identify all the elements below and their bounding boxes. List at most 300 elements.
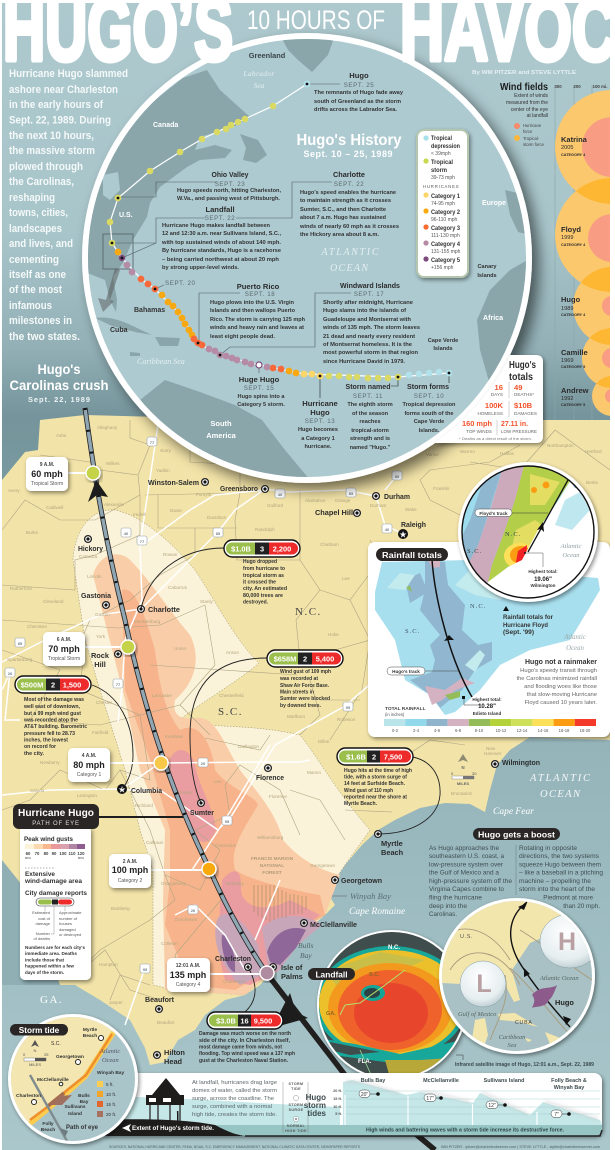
map: county names: Lee	[214, 779, 222, 784]
byline: By WM PITZER and STEVE LYTTLE	[472, 70, 576, 76]
callout: Charlotte damage: tropical storm as	[243, 573, 284, 579]
rainfall labels: N.C.	[470, 603, 486, 610]
callout: Columbia damage: 2	[51, 680, 55, 690]
map: county names: Fairfield	[92, 730, 109, 735]
callout: Columbia damage	[15, 676, 91, 757]
chart values: 20"	[361, 1092, 368, 1098]
map: county names: Lee	[342, 576, 350, 581]
eye position markers and time labels	[26, 457, 274, 992]
satellite labels: S.C.	[369, 972, 380, 978]
time box: 6 a.m.	[43, 632, 85, 666]
map: county names: Robeson	[337, 717, 356, 722]
rainfall: Hugo not a rainmaker text: that slow-moving Hurricane	[527, 692, 597, 698]
callout: Myrtle Beach damage: Hugo hits at the time of high	[344, 768, 413, 774]
callout: Charleston damage	[199, 1012, 296, 1064]
intro text: milestones in	[9, 315, 72, 327]
legend: city damage reports: immediate area. Deaths	[25, 951, 77, 956]
time connectors	[68, 473, 267, 974]
event: Ohio Valley: Ohio Valley	[212, 170, 249, 179]
storm tide map labels: Atlantic	[99, 1048, 120, 1055]
callout: Myrtle Beach damage: Wind gust of 110 mph	[344, 788, 393, 794]
circle: leader lines	[112, 84, 449, 398]
wind storm labels: 1999	[561, 235, 573, 241]
rainfall labels: (Sept. '99)	[503, 629, 534, 636]
callout: Charlotte damage: 3	[260, 544, 264, 554]
circle: shadow arrow through Florida	[98, 268, 120, 312]
intro text: ashore near Charleston	[9, 84, 118, 96]
event: Hugo Sept 25: The remnants of Hugo fade away	[314, 90, 404, 96]
storm tide scale	[23, 1040, 49, 1067]
boost labels: Sea	[508, 1042, 516, 1049]
city names: Charleston	[215, 954, 251, 963]
panel: Hugo's totals: LOW PRESSURE	[501, 429, 537, 434]
satellite labels	[326, 945, 400, 1065]
map: county names: Lexington	[77, 793, 97, 798]
event: Storm forms: Storm forms	[407, 382, 449, 391]
wind storm labels: CATEGORY 4	[561, 243, 586, 247]
event: Hugo Sept 25: SEPT. 25	[344, 82, 374, 89]
rainfall: Hugo's track: Hugo's track	[392, 669, 420, 674]
rainfall labels: Rainfall totals for	[503, 614, 554, 621]
chart heading: Hugo	[306, 1093, 326, 1102]
callout: Sumter damage: Shaw Air Force Base.	[280, 683, 329, 689]
map: county names: Marlboro	[287, 714, 306, 719]
legend: storm categories: Category 1	[431, 194, 461, 200]
callout: Charleston damage: side of the city. In Charleston itself,	[199, 1038, 290, 1044]
rainfall legend scale: 12-14	[517, 728, 528, 733]
boost: Hugo's track	[511, 902, 571, 1027]
chart values: 17"	[426, 1096, 434, 1102]
legend: city damage reports: houses	[59, 921, 72, 926]
map: county names: Forsyth	[196, 492, 212, 497]
map: interstate shields: 85	[216, 531, 221, 536]
legend: city damage reports: Approximate	[59, 910, 82, 915]
panel: Hugo's totals: DEATHS*	[514, 392, 534, 397]
chart column headings: Winyah Bay	[554, 1085, 584, 1091]
map: county names: Guilford	[267, 503, 284, 508]
map: county names: Calhoun	[146, 840, 164, 845]
callout: Columbia damage: was recorded atop the	[23, 718, 78, 724]
callout: Charleston damage: $3.0B	[216, 1016, 236, 1026]
callout: Myrtle Beach damage	[337, 748, 413, 807]
map: county names: Davie	[170, 508, 182, 513]
map: county names: Marion	[307, 770, 321, 775]
event: Landfall: – being carried northwest at about 20 mph	[162, 257, 280, 263]
rainfall: Hugo not a rainmaker text: Hugo's speedy transit through	[520, 668, 597, 674]
map: land	[2, 415, 610, 1065]
event: Landfall: Hurricane Hugo makes landfall between	[162, 223, 271, 229]
boost: high pressure sphere: H	[558, 928, 576, 956]
rainfall legend scale: TOTAL RAINFALL	[385, 706, 426, 712]
map: county names: Kershaw	[165, 734, 184, 739]
map: interstate shields: 85	[349, 491, 354, 496]
map: county names: Cabarrus	[168, 585, 188, 590]
callout: Sumter damage: Wind gust of 109 mph	[280, 669, 332, 675]
legend: city damage reports: Number	[36, 931, 51, 936]
map: compass and scale: 30	[472, 771, 477, 776]
map: county names: Darlington	[238, 744, 259, 749]
time box: 4 a.m.	[68, 748, 110, 782]
callout: Myrtle Beach damage: $1.6B	[346, 752, 366, 762]
wind storm labels: Andrew	[561, 386, 589, 395]
circle: geographic labels: America	[206, 431, 237, 440]
marker: 12:01 a.m.	[260, 966, 274, 980]
callout: Myrtle Beach damage: 14 feet at Surfside Beach.	[344, 781, 405, 787]
callout: Charleston damage: 16	[240, 1016, 249, 1026]
circle: geographic labels: Cuba	[110, 327, 128, 334]
panel: Hugo's totals: 160 mph	[462, 419, 492, 428]
storm tide map labels: Bulls	[78, 1093, 90, 1099]
rainfall: Hugo not a rainmaker text: Floyd caused 10 years later.	[524, 700, 597, 706]
event: Storm forms: forms south of the	[404, 411, 454, 417]
time box: 4 a.m.: 80 mph	[73, 760, 105, 770]
rainfall legend scale: 0-2	[392, 728, 399, 733]
explainer text: surge, across the coastline. The	[192, 1096, 275, 1102]
chart column headings: Sullivans Island	[484, 1078, 524, 1084]
tide diagram key: STORM	[289, 1082, 303, 1086]
boost text: Virginia Capes combine to	[429, 886, 505, 893]
circle title	[296, 132, 402, 159]
explainer text: At landfall, hurricanes drag large	[192, 1080, 278, 1086]
map: county names: York	[96, 634, 106, 639]
legend: city damage reports: or destroyed	[59, 932, 81, 937]
boost text: directions, the two systems	[519, 853, 599, 860]
storm tide map labels: Ocean	[102, 1057, 119, 1064]
heading: Hugo's Carolinas crush: Sept. 22, 1989	[28, 395, 90, 404]
chart values: 12"	[488, 1103, 496, 1109]
map: compass and scale: MILES	[457, 781, 469, 786]
map: state and water labels: Cape Fear	[493, 807, 534, 817]
boost text	[429, 845, 604, 918]
legend: peak wind gusts: 100	[59, 851, 67, 856]
rainfall labels: Hurricane Floyd	[503, 622, 548, 629]
callout: Charlotte damage: destroyed.	[243, 600, 268, 606]
storm tide key: 5 ft.	[106, 1082, 114, 1087]
boost text: fling the hurricane	[429, 894, 483, 902]
wind fields key: Tropical-	[523, 136, 540, 141]
callout leader lines	[92, 548, 440, 1012]
event: Windward Islands: most powerful storm in that region	[323, 350, 419, 356]
map: interstate shields: 77	[150, 440, 155, 445]
map: state and water labels: ATLANTIC	[529, 773, 591, 784]
city names: Gastonia	[81, 591, 112, 600]
event: Landfall: By hurricane standards, Hugo is a racehorse	[162, 248, 281, 254]
lens labels	[467, 531, 582, 588]
map: 100-110 mph wind zone	[215, 914, 322, 985]
credits: WM PITZER - lpitzer@charlotteobserver.com | STEVE LYTTLE - slyttle@charlotteobserver.com	[441, 1144, 600, 1149]
boost text: southeastern U.S. coast, a	[429, 853, 504, 860]
lens: Floyd's track: Floyd's track	[479, 511, 508, 516]
map: county names: Newberry	[40, 760, 60, 765]
event: Hurricane Hugo Sept 13: Hugo becomes	[298, 427, 338, 433]
legend: storm categories: Category 4	[431, 242, 461, 248]
map: interstate shields: 85	[395, 474, 400, 479]
event: Puerto Rico: Rico. The storm is carrying 125 mph	[210, 317, 306, 323]
callout: Columbia damage: 1,500	[63, 680, 81, 690]
map: interstate shields: 40	[385, 527, 390, 532]
map: compass and scale: 0	[451, 771, 454, 776]
storm tide map labels: McClellanville	[37, 1077, 69, 1083]
circle: geographic labels	[110, 51, 506, 440]
legend: city damage reports: damaged	[59, 927, 76, 932]
legend: storm categories: 39-73 mph	[431, 175, 455, 181]
time box: 9 a.m.: 60 mph	[31, 469, 63, 479]
satellite caption	[455, 1055, 594, 1068]
legend: city damage reports: of deaths	[34, 936, 50, 941]
intro text: the next 10 hours,	[9, 130, 94, 142]
title: HUGO'S 10 HOURS OF HAVOC	[5, 3, 610, 64]
event: Charlotte: Charlotte	[333, 170, 365, 179]
circle: geographic labels: Caribbean Sea	[137, 357, 185, 366]
map: county names: Colleton	[161, 941, 178, 946]
callout: Sumter damage: by downed trees.	[280, 703, 321, 709]
storm tide scale: 0	[23, 1052, 26, 1057]
legend: city damage reports: damage	[36, 921, 51, 926]
city markers	[85, 479, 498, 1058]
map: interstate shields: 26	[8, 671, 13, 676]
map: county names: Bamberg	[111, 906, 130, 911]
legend: city damage reports: number of	[59, 916, 78, 921]
map: county names: Spartanburg	[7, 657, 33, 662]
event: Landfall: SEPT. 22	[205, 215, 235, 222]
map: Carolinas base	[2, 415, 610, 1150]
map: county names: Warren	[460, 449, 475, 454]
track: tropical storm points	[107, 103, 401, 381]
city names: Chapel Hill	[315, 508, 353, 517]
lens labels: Highest total:	[528, 569, 558, 574]
satellite labels: FLA.	[358, 1059, 372, 1065]
rainfall label pill	[376, 548, 448, 561]
panel: Hugo's totals: HOMELESS	[477, 411, 503, 416]
legend: extensive damage	[24, 868, 83, 885]
panel: wind fields	[500, 82, 615, 420]
heading: Hugo's Carolinas crush: Carolinas crush	[10, 377, 108, 393]
callout: Sumter damage	[267, 650, 343, 709]
time box: 4 a.m.: Category 1	[77, 772, 101, 778]
boost labels	[458, 934, 579, 1049]
legend: storm categories: Tropical	[431, 136, 452, 142]
time box: 2 a.m.	[109, 854, 151, 888]
event: Huge Hugo	[237, 375, 285, 408]
event: Charlotte: winds of nearly 60 mph as it crosses	[299, 224, 399, 230]
map: compass and scale: N	[461, 765, 465, 770]
rainfall legend scale	[384, 706, 596, 733]
map: ocean and Georgia	[2, 740, 610, 1150]
intro text: the massive storm	[9, 145, 95, 157]
boost text: low-pressure system over	[429, 862, 503, 868]
boost text: the Gulf of Mexico and a	[429, 870, 499, 876]
map: county names: Beaufort	[157, 1020, 175, 1025]
event: Charlotte: about 7 a.m. Hugo has sustained	[300, 215, 387, 221]
callout: Columbia damage: well east of downtown,	[23, 704, 80, 710]
city names: Myrtle	[381, 839, 403, 848]
wind fields key: Hurricane	[523, 123, 542, 128]
map: county names: Rutherford	[10, 586, 32, 591]
legend: city damage reports: Numbers are for each city's	[25, 945, 85, 950]
chart axis: 20 ft.	[333, 1089, 342, 1093]
map: francis marion label: FRANCIS MARION	[251, 856, 294, 862]
event: Hugo Sept 25: south of Greenland as the storm	[314, 99, 401, 105]
storm tide map labels: Bay	[80, 1099, 89, 1105]
boost text: storm into the heart of the	[519, 886, 596, 893]
rainfall labels: Edisto Island	[473, 711, 501, 716]
arrow: eye path heads	[88, 480, 308, 1028]
legend: storm categories: +156 mph	[431, 265, 454, 271]
map: interstate shields: 20	[201, 761, 206, 766]
map: state and water labels	[40, 606, 591, 1006]
wind circles	[555, 90, 615, 416]
map: interstate shields: 95	[143, 967, 148, 972]
event: Charlotte: SEPT. 22	[334, 181, 364, 188]
event: Landfall: with top sustained winds of about 140 mph.	[161, 240, 281, 246]
event: Windward Islands	[322, 281, 420, 365]
intro text: plowed through	[9, 161, 83, 173]
callout: Myrtle Beach damage: 7,500	[384, 752, 402, 762]
panel: rainfall totals	[368, 542, 610, 737]
marker: 9 a.m.	[86, 466, 100, 480]
boost labels: Caribbean	[499, 1034, 525, 1041]
city names: McClellanville	[310, 920, 357, 929]
time box: 4 a.m.: 4 A.M.	[82, 753, 97, 759]
map: county names: Anson	[226, 650, 239, 655]
chart heading: storm	[304, 1101, 326, 1110]
legend panel: wind gusts and damage reports	[20, 826, 91, 980]
event: Storm forms: Islands.	[419, 428, 440, 434]
callout: Myrtle Beach damage: reported near the shore at	[344, 794, 407, 800]
intro text: Sept. 22, 1989. During	[9, 114, 111, 126]
legend: city damage reports: City damage reports	[25, 890, 87, 897]
capital stars: ★	[399, 530, 407, 540]
map: interstate shields: 95	[346, 705, 351, 710]
map: interstate shields: 77	[116, 682, 121, 687]
credits	[109, 1144, 600, 1149]
panel: Hugo's totals: Hugo's	[509, 360, 536, 371]
rainfall labels: Ocean	[566, 645, 584, 652]
map: county names: Chatham	[320, 542, 339, 547]
legend: peak wind gusts: 60	[26, 851, 31, 856]
wind storm labels: Hugo	[561, 295, 581, 304]
rainfall: Hugo not a rainmaker text: and flooding woes like those	[524, 684, 597, 690]
map: county names	[7, 425, 602, 1025]
circle: geographic labels: South	[210, 419, 232, 428]
city names: Georgetown	[341, 876, 382, 885]
explainer text: domes of water, called the storm	[192, 1088, 277, 1094]
chart column headings	[361, 1078, 587, 1091]
callout: Charlotte damage: Hugo dropped	[243, 559, 278, 565]
time box: 12:01 a.m.	[167, 958, 210, 992]
map: county names: Cherokee	[27, 624, 47, 629]
map: county names: Stanly	[200, 599, 213, 604]
map: state and water labels: GA.	[40, 994, 63, 1006]
rainfall labels: Highest total:	[472, 697, 502, 702]
panel: Hugo's totals	[434, 355, 543, 443]
callout: Columbia damage: Most of the damage was	[24, 697, 84, 703]
event: Storm named	[346, 382, 393, 451]
rainfall legend scale: 6-8	[455, 728, 462, 733]
map: francis marion label: FOREST	[262, 870, 282, 876]
city names: Hilton	[164, 1048, 185, 1057]
panel: Hugo's totals: 16	[495, 383, 503, 392]
chart heading: tides	[307, 1109, 327, 1118]
rainfall legend scale: 18-20	[580, 728, 591, 733]
water: chart surge	[343, 1080, 602, 1125]
map: county names: Caldwell	[46, 505, 63, 510]
legend: storm categories: HURRICANES	[423, 184, 459, 189]
satellite labels: GA.	[326, 1011, 336, 1017]
circle: storm track	[107, 81, 452, 381]
map: county names: Dorchester	[175, 917, 198, 922]
event: Huge Hugo: SEPT. 15	[244, 385, 274, 392]
map: state and water labels: OCEAN	[540, 789, 581, 800]
intro text: landscapes	[9, 223, 62, 235]
map: 110-120 mph wind zone	[222, 928, 306, 972]
city names: Greensboro	[220, 484, 258, 493]
lens labels: Atlantic	[560, 543, 582, 550]
map: county names: Dillon	[318, 739, 330, 744]
city names: Hill	[94, 660, 106, 669]
wind storm labels: 1992	[561, 396, 573, 402]
map: interstate shields: 85	[18, 641, 23, 646]
legend: city damage reports: days of the storm.	[25, 970, 64, 975]
event: Windward Islands: SEPT. 17	[354, 291, 384, 298]
map: interstate shields: 40	[124, 531, 129, 536]
storm tide map labels: Charleston	[16, 1093, 41, 1099]
rainfall legend scale: (in inches)	[385, 712, 405, 717]
chart values	[359, 1090, 571, 1118]
panel: storm tide explainer and chart	[100, 1073, 602, 1137]
city names	[78, 478, 540, 1066]
wind fields heading: 100 mi.	[593, 84, 607, 89]
rainfall legend scale: 16-18	[559, 728, 570, 733]
rainfall labels: Atlantic	[563, 634, 586, 641]
wind fields heading: center of the eye	[511, 107, 548, 113]
map: county names: Chester	[96, 700, 113, 705]
panel: Hugo's totals: $10B	[514, 401, 533, 410]
legend: peak wind gusts: 110	[69, 851, 76, 856]
time box: 2 a.m.: 100 mph	[112, 865, 148, 875]
extent of storm tide label: Extent of Hugo's storm tide.	[132, 1125, 214, 1132]
lens: storm tide map	[8, 1014, 138, 1150]
event: Windward Islands: Shortly after midnight, Hurricane	[323, 300, 413, 306]
event: Puerto Rico: SEPT. 18	[245, 291, 275, 298]
city names: Hickory	[78, 544, 104, 553]
callout: Sumter damage: $658M	[274, 654, 296, 664]
event: Storm named: tropical-storm	[351, 428, 389, 434]
legend: peak wind gusts: 70	[35, 851, 40, 856]
boost labels: U.S.	[460, 934, 473, 940]
map: county names: Lancaster	[152, 693, 173, 698]
map: state and water labels: Winyah Bay	[350, 891, 391, 901]
time box: 12:01 a.m.: Category 4	[176, 982, 200, 988]
arrow: extent pointer	[122, 1124, 131, 1132]
event: Charlotte: to maintain strength as it crosses	[300, 198, 391, 204]
city names: Florence	[256, 773, 284, 782]
map: county names: Williamsburg	[257, 835, 284, 840]
storm tide map labels: Myrtle	[83, 1027, 97, 1033]
boost text: Carolinas.	[429, 911, 457, 918]
callout: Sumter damage: 2	[303, 654, 307, 664]
map: cities	[78, 478, 540, 1066]
event: Puerto Rico	[209, 282, 306, 340]
legend: city damage reports	[25, 890, 87, 975]
city names: Head	[164, 1057, 183, 1066]
event: Hugo Sept 25: drifts across the Labrador Sea.	[314, 107, 397, 113]
map: county names: Jasper	[109, 1000, 123, 1005]
map: county names: Vance	[426, 452, 439, 457]
event: Charlotte: the Hickory area about 8 a.m.	[300, 232, 379, 238]
chart column headings: Bulls Bay	[361, 1078, 385, 1084]
tide diagram key: SURGE	[289, 1108, 304, 1112]
